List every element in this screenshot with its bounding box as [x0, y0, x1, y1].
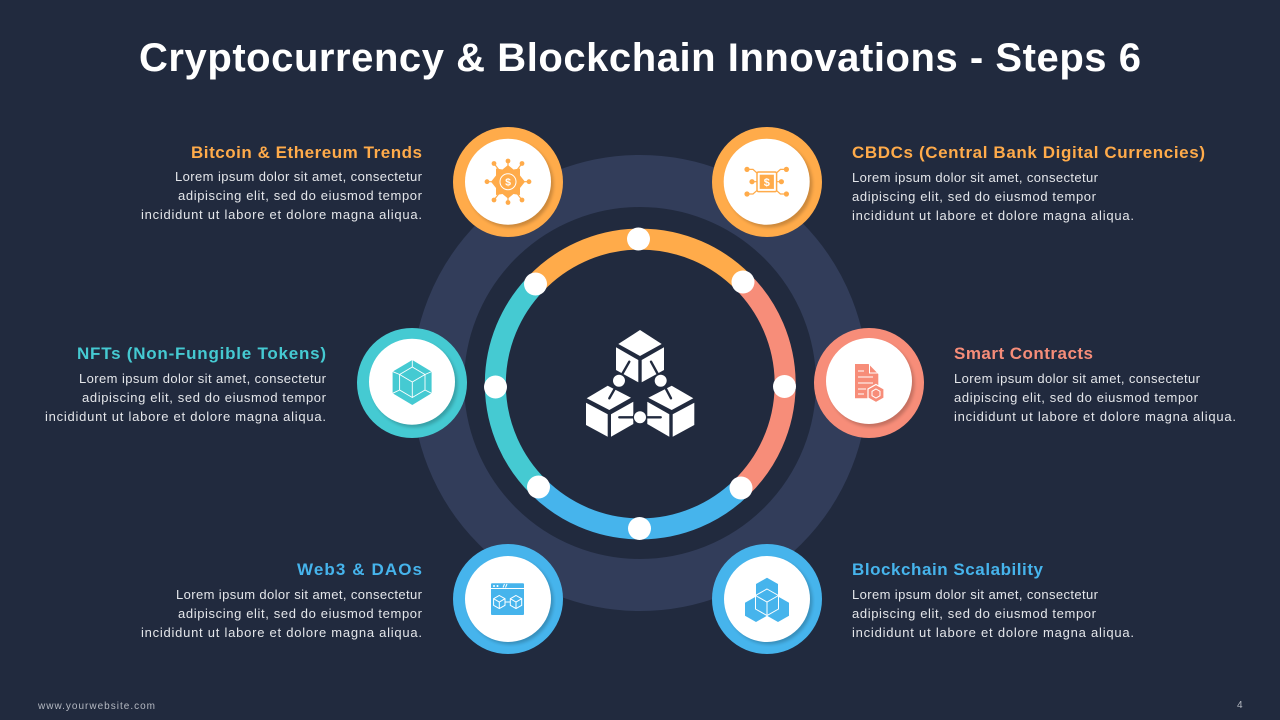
body text: adipiscing elit, sed do eiusmod tempor [82, 390, 327, 405]
panel: Bitcoin & Ethereum Trends [141, 127, 563, 237]
body text: incididunt ut labore et dolore magna aliqua. [852, 208, 1134, 223]
body text [141, 169, 423, 222]
heading: Bitcoin & Ethereum Trends [191, 143, 422, 162]
body text [141, 587, 423, 640]
heading: Blockchain Scalability [852, 560, 1044, 579]
body text: incididunt ut labore et dolore magna aliqua. [852, 625, 1134, 640]
icon: coin network [485, 159, 531, 205]
body text: Lorem ipsum dolor sit amet, consectetur [852, 587, 1099, 602]
body text [45, 371, 327, 424]
footer website: www.yourwebsite.com [37, 701, 155, 712]
body text: Lorem ipsum dolor sit amet, consectetur [79, 371, 327, 386]
body text: adipiscing elit, sed do eiusmod tempor [178, 606, 423, 621]
badge face [369, 339, 455, 425]
badge face [724, 556, 810, 642]
badge face [826, 338, 912, 424]
page number: 4 [1237, 700, 1243, 711]
segmented colour ring [495, 239, 785, 529]
badge ring [814, 328, 924, 438]
body text: adipiscing elit, sed do eiusmod tempor [954, 390, 1199, 405]
title: Cryptocurrency & Blockchain Innovations - Steps 6 [139, 36, 1141, 80]
outer background ring [438, 181, 842, 585]
ring connector dots [484, 228, 796, 540]
icon: contract document [855, 364, 884, 402]
icon: digital currency chip: $ [764, 177, 770, 189]
badge ring [357, 328, 467, 438]
badge ring [453, 544, 563, 654]
body text: incididunt ut labore et dolore magna aliqua. [141, 625, 422, 640]
panel: Web3 & DAOs [141, 544, 563, 654]
panel: NFTs [45, 328, 467, 438]
badge shadow [726, 558, 812, 644]
body text: Lorem ipsum dolor sit amet, consectetur [176, 587, 423, 602]
panel: Smart Contracts [814, 328, 1236, 438]
badge shadow [372, 342, 458, 428]
badge face [465, 139, 551, 225]
icon: scaling hexagon cubes [745, 578, 789, 622]
body text: Lorem ipsum dolor sit amet, consectetur [852, 170, 1099, 185]
badge shadow [726, 142, 812, 228]
body text: Lorem ipsum dolor sit amet, consectetur [954, 371, 1201, 386]
badge ring [453, 127, 563, 237]
icon: hexagon cube [393, 360, 432, 405]
heading: CBDCs (Central Bank Digital Currencies) [852, 143, 1205, 162]
body text [954, 371, 1236, 424]
body text: adipiscing elit, sed do eiusmod tempor [852, 606, 1097, 621]
body text [852, 587, 1134, 640]
badge face [465, 556, 551, 642]
panel: Blockchain Scalability [712, 544, 1134, 654]
icon: digital currency chip [744, 167, 789, 197]
icon: central blockchain cubes [586, 330, 694, 437]
badge shadow [828, 341, 914, 427]
badge ring [712, 127, 822, 237]
body text: adipiscing elit, sed do eiusmod tempor [852, 189, 1097, 204]
icon: coin network: $ [505, 176, 511, 188]
heading: NFTs (Non-Fungible Tokens) [77, 344, 326, 363]
badge ring [712, 544, 822, 654]
icon: browser with linked cubes [491, 583, 524, 615]
body text: Lorem ipsum dolor sit amet, consectetur [175, 169, 423, 184]
body text: adipiscing elit, sed do eiusmod tempor [178, 188, 423, 203]
badge shadow [468, 558, 554, 644]
body text: incididunt ut labore et dolore magna aliqua. [954, 409, 1236, 424]
heading: Smart Contracts [954, 344, 1093, 363]
heading: Web3 & DAOs [297, 560, 422, 579]
badge face [724, 139, 810, 225]
body text: incididunt ut labore et dolore magna aliqua. [141, 207, 422, 222]
body text [852, 170, 1134, 223]
badge shadow [468, 142, 554, 228]
panel: CBDCs [712, 127, 1205, 237]
body text: incididunt ut labore et dolore magna aliqua. [45, 409, 326, 424]
